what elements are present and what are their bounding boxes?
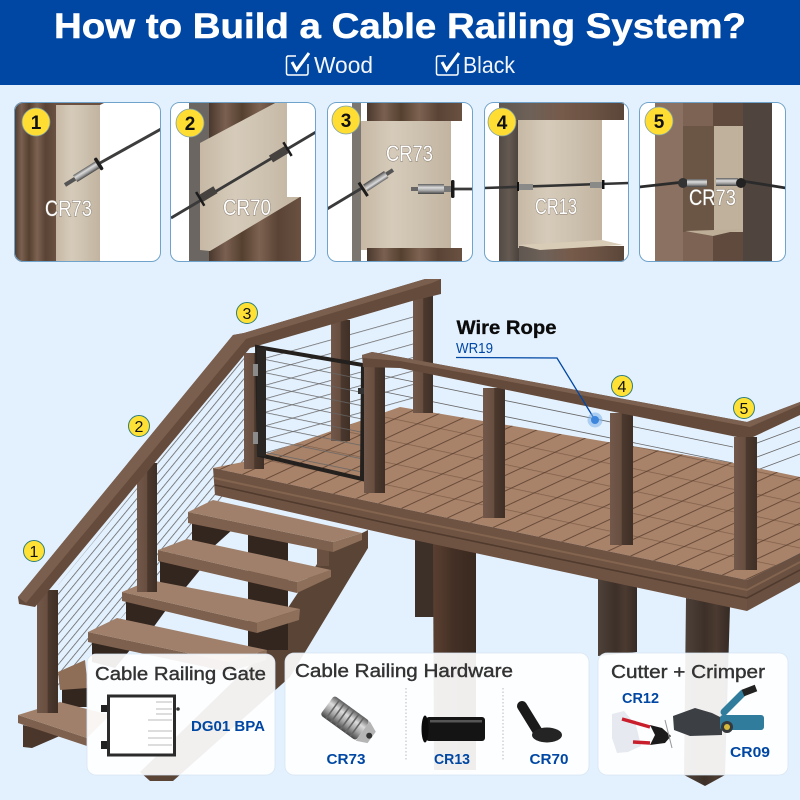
stair stringer and supports bbox=[92, 520, 368, 781]
gate bbox=[253, 347, 368, 479]
label: CR13: CR13 bbox=[535, 194, 577, 219]
icon: gate bbox=[101, 696, 180, 755]
callout: wire rope bbox=[456, 318, 602, 428]
badge: position 3 bbox=[236, 302, 258, 324]
icon: CR70 angle grommet bbox=[522, 706, 562, 742]
label: CR73: CR73 bbox=[326, 752, 366, 768]
icon: CR13 sleeve bbox=[422, 716, 485, 742]
badge 1 bbox=[22, 108, 50, 136]
badge 5 bbox=[645, 107, 673, 135]
badge: position 3: 3 bbox=[243, 306, 252, 323]
cables: upper landing bbox=[264, 302, 433, 470]
badge 1: 1 bbox=[31, 113, 42, 134]
badge 2: 2 bbox=[185, 114, 195, 135]
heading: gate: Cable Railing Gate bbox=[95, 664, 266, 684]
option: black: Black bbox=[463, 52, 515, 78]
deck surface bbox=[213, 407, 800, 580]
panel: step 1 bbox=[14, 102, 161, 262]
option: wood: Wood bbox=[314, 52, 373, 78]
stair handrail bbox=[18, 279, 441, 607]
label: CR73: CR73 bbox=[45, 196, 92, 221]
heading: cutter + crimper: Cutter + Crimper bbox=[611, 662, 765, 682]
panel: step 3 bbox=[327, 102, 473, 262]
badge 5: 5 bbox=[654, 112, 665, 133]
badge: position 4: 4 bbox=[618, 379, 627, 396]
label: CR73: CR73 bbox=[386, 141, 433, 166]
lower tread bbox=[58, 660, 88, 707]
icon: cutter and gloves bbox=[612, 711, 672, 753]
callout: wire rope: WR19 bbox=[456, 340, 493, 357]
badge: position 2 bbox=[128, 416, 150, 436]
badge: position 1 bbox=[24, 540, 44, 562]
panel: cable railing hardware bbox=[285, 653, 589, 775]
posts bbox=[37, 296, 433, 713]
header band bbox=[0, 0, 800, 85]
option: black bbox=[436, 52, 515, 78]
badge: position 2: 2 bbox=[135, 419, 144, 436]
badge: position 5: 5 bbox=[740, 401, 749, 418]
stair treads bbox=[88, 500, 362, 672]
panel: step 2 bbox=[170, 102, 316, 262]
label: CR12: CR12 bbox=[622, 691, 659, 707]
cables: stair run bbox=[58, 355, 244, 690]
badge: position 1: 1 bbox=[30, 544, 39, 561]
label: CR09: CR09 bbox=[730, 745, 770, 761]
badge 3: 3 bbox=[341, 111, 351, 132]
label: CR13: CR13 bbox=[434, 752, 470, 768]
cables: deck side bbox=[385, 360, 800, 470]
badge 3 bbox=[332, 106, 360, 134]
deck and stair illustration bbox=[18, 279, 800, 786]
panel: cutter and crimper bbox=[598, 653, 788, 775]
label: CR70: CR70 bbox=[223, 195, 271, 220]
badge 4: 4 bbox=[497, 113, 508, 134]
option: wood bbox=[286, 52, 373, 78]
panel: step 4 bbox=[484, 102, 629, 262]
panel: step 5 bbox=[639, 102, 786, 262]
badge 2 bbox=[176, 109, 204, 137]
deck handrail bbox=[362, 352, 800, 437]
badge: position 5 bbox=[734, 398, 754, 418]
heading: hardware: Cable Railing Hardware bbox=[295, 661, 513, 681]
bottom landing bbox=[18, 702, 110, 748]
panel: cable railing gate bbox=[87, 654, 275, 775]
title: How to Build a Cable Railing System? bbox=[54, 7, 746, 46]
badge 4 bbox=[488, 108, 516, 136]
label: CR73: CR73 bbox=[689, 185, 736, 210]
label: DG01 BPA: DG01 BPA bbox=[191, 719, 266, 735]
callout: wire rope: Wire Rope bbox=[456, 318, 556, 339]
icon: crimper tool bbox=[673, 688, 764, 736]
label: CR70: CR70 bbox=[530, 752, 568, 768]
deck posts bbox=[364, 366, 757, 570]
support posts bbox=[415, 538, 730, 786]
deck fascia bbox=[213, 468, 800, 611]
icon: CR73 set screw bbox=[320, 695, 379, 747]
badge: position 4 bbox=[612, 376, 632, 396]
